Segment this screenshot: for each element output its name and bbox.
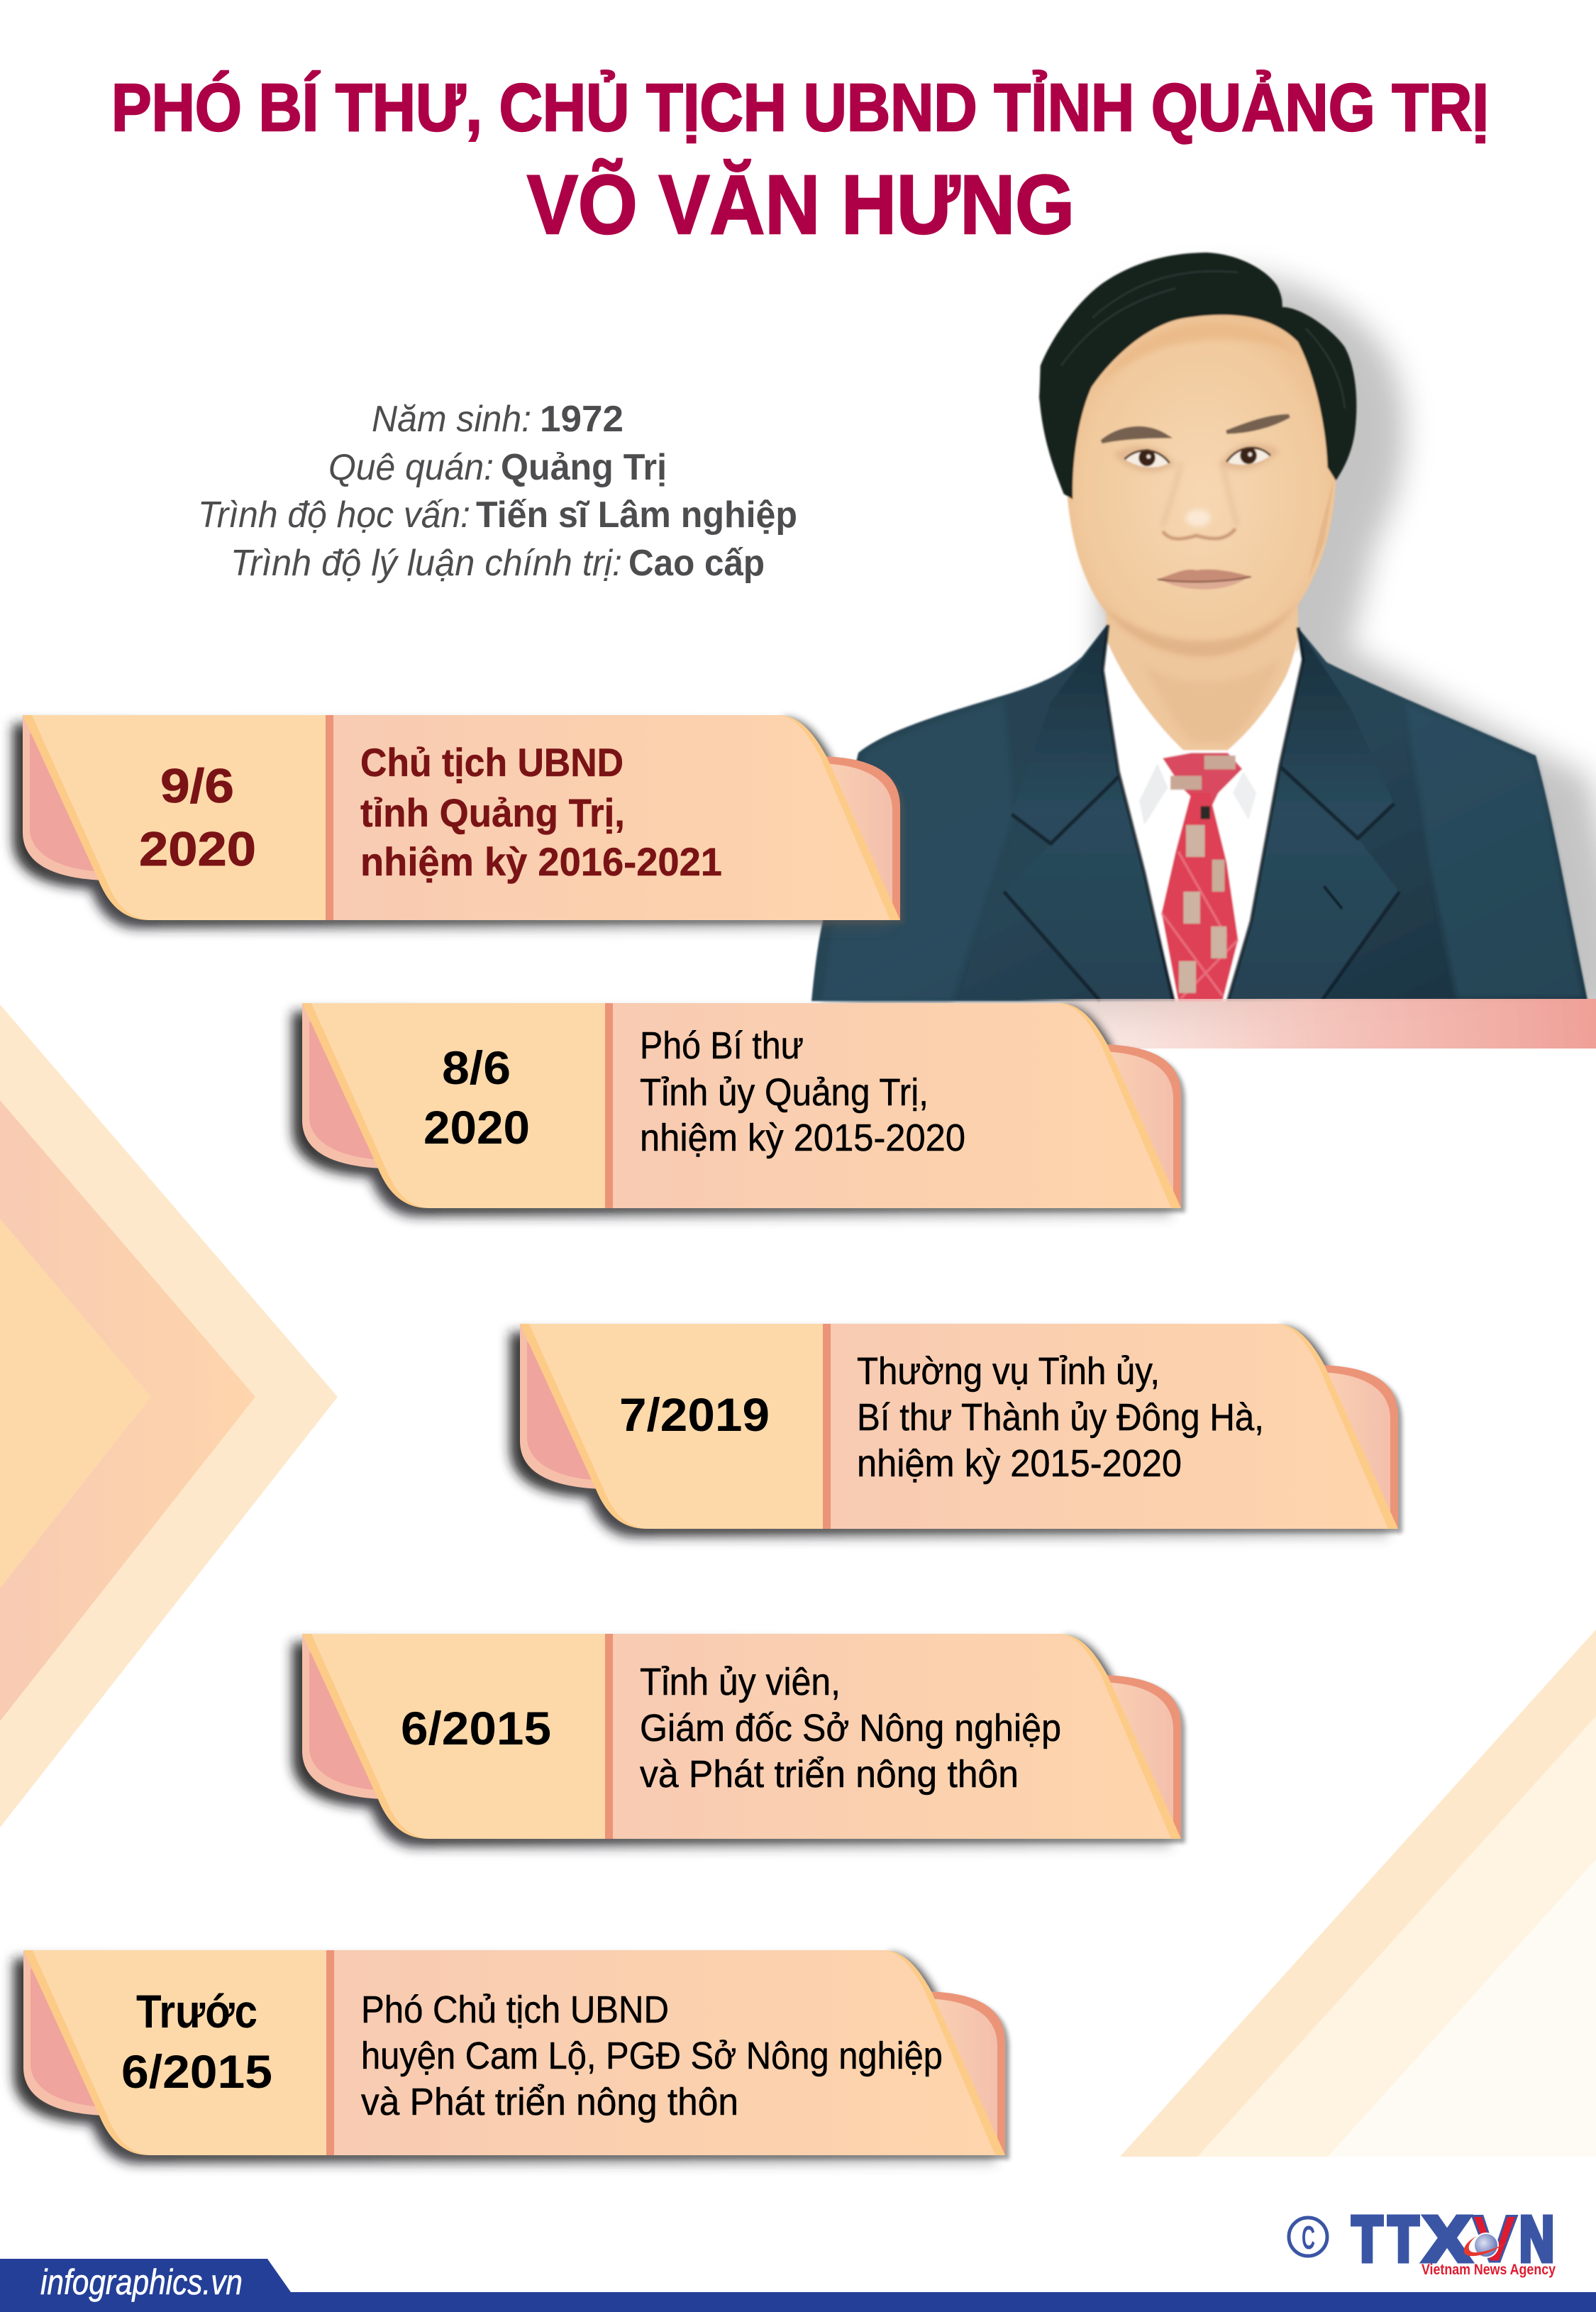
logo: TTXVN Vietnam News Agency: T <box>1388 2204 1419 2275</box>
date label: 9/6 <box>160 759 234 813</box>
date label: 2020 <box>423 1101 530 1154</box>
personal information block: Cao cấp <box>628 543 765 584</box>
personal information block: Tiến sĩ Lâm nghiệp <box>476 494 797 536</box>
personal information block: Trình độ học vấn: <box>198 494 470 536</box>
position description <box>640 1661 1061 1796</box>
date label: 6/2015 <box>121 2045 272 2098</box>
date label: 2020 <box>139 822 256 876</box>
icon: copyright mark <box>1289 2218 1327 2256</box>
position description: Bí thư Thành ủy Đông Hà, <box>857 1396 1264 1439</box>
position description: Tỉnh ủy Quảng Trị, <box>640 1071 929 1114</box>
position description: Giám đốc Sở Nông nghiệp <box>640 1707 1061 1749</box>
personal information block: Quê quán: <box>328 447 494 488</box>
icon: copyright mark: C <box>1302 2219 1315 2256</box>
date label <box>139 759 256 876</box>
title <box>111 70 1489 252</box>
portrait photo <box>811 253 1596 1017</box>
personal information block: Năm sinh: <box>372 399 531 440</box>
date label: 8/6 <box>442 1041 511 1094</box>
panel: career step before 6/2015 <box>13 1950 1009 2164</box>
position description: Phó Chủ tịch UBND <box>361 1989 669 2031</box>
position description: nhiệm kỳ 2015-2020 <box>857 1442 1182 1485</box>
background decoration: left chevrons <box>0 1005 338 1827</box>
logo: TTXVN Vietnam News Agency: X <box>1424 2204 1470 2275</box>
position description: và Phát triển nông thôn <box>361 2081 738 2123</box>
position description: Phó Bí thư <box>640 1024 804 1067</box>
logo: TTXVN Vietnam News Agency: V <box>1472 2201 1517 2276</box>
website label: infographics.vn <box>40 2262 243 2302</box>
position description: tỉnh Quảng Trị, <box>360 790 625 835</box>
date label <box>121 1985 272 2098</box>
personal information block <box>198 399 797 584</box>
panel: career step 9/6/2020 <box>13 715 904 929</box>
panel: career step 6/2015 <box>292 1634 1185 1847</box>
personal information block: Quảng Trị <box>501 447 667 488</box>
logo: TTXVN Vietnam News Agency: T <box>1352 2204 1382 2275</box>
date label: 6/2015 <box>401 1702 551 1754</box>
necktie <box>1162 753 1242 1001</box>
position description <box>361 1989 943 2123</box>
position description <box>360 740 722 884</box>
position description: Chủ tịch UBND <box>360 740 624 785</box>
decorative pink ribbon band under portrait <box>1021 999 1596 1049</box>
background decoration: right diagonal bands <box>1120 1630 1596 2157</box>
position description: và Phát triển nông thôn <box>640 1753 1019 1796</box>
position description: nhiệm kỳ 2015-2020 <box>640 1117 965 1159</box>
position description: nhiệm kỳ 2016-2021 <box>360 839 722 884</box>
personal information block: 1972 <box>540 399 624 440</box>
panel: career step 8/6/2020 <box>292 1003 1185 1217</box>
logo: TTXVN Vietnam News Agency: Vietnam News Agency <box>1422 2262 1556 2278</box>
title: VÕ VĂN HƯNG <box>527 158 1075 252</box>
position description: huyện Cam Lộ, PGĐ Sở Nông nghiệp <box>361 2035 943 2077</box>
position description <box>640 1024 965 1159</box>
position description: Tỉnh ủy viên, <box>640 1661 841 1703</box>
position description: Thường vụ Tỉnh ủy, <box>857 1350 1160 1393</box>
logo: TTXVN Vietnam News Agency: N <box>1519 2204 1554 2275</box>
logo: TTXVN Vietnam News Agency <box>1352 2201 1556 2278</box>
date label: Trước <box>136 1985 257 2037</box>
footer bar with website tab <box>0 2259 1596 2312</box>
position description <box>857 1350 1264 1485</box>
date label: 7/2019 <box>619 1388 770 1441</box>
panel: career step 7/2019 <box>510 1324 1402 1537</box>
personal information block: Trình độ lý luận chính trị: <box>231 543 622 584</box>
date label <box>423 1041 530 1154</box>
